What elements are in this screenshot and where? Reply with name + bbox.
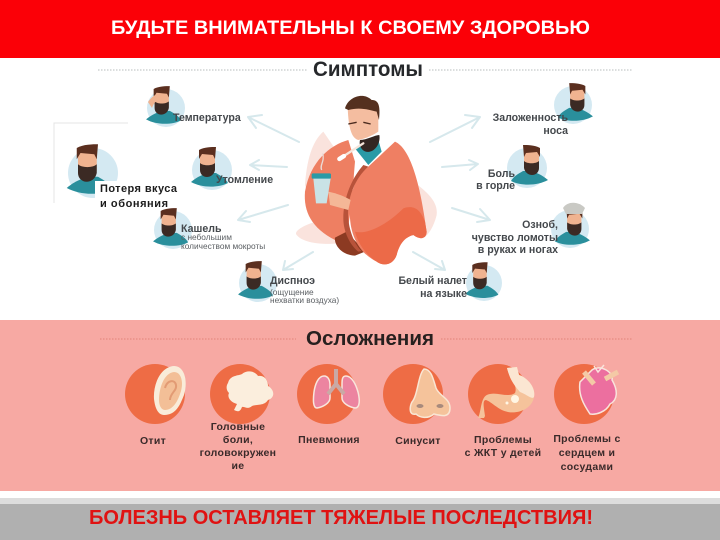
complication: heart and vascular problems [553, 364, 621, 473]
symptom: cough: с небольшим [181, 232, 232, 242]
complication: otitis [125, 364, 186, 447]
symptom: temperature: Температура [173, 112, 241, 124]
symptom: loss of taste and smell [54, 123, 178, 210]
complication: headaches and dizziness: головокружен [200, 447, 276, 459]
panel: complications [0, 320, 720, 491]
footer band: БОЛЕЗНЬ ОСТАВЛЯЕТ ТЯЖЕЛЫЕ ПОСЛЕДСТВИЯ! [89, 506, 593, 529]
complication: headaches and dizziness [200, 364, 276, 472]
symptom: cough: Кашель [181, 223, 222, 235]
symptom: temperature [146, 86, 241, 127]
symptom: chills: чувство ломоты [472, 232, 558, 244]
symptom: nasal congestion: носа [543, 125, 568, 137]
central figure: sick man in blanket [296, 96, 437, 264]
symptom: dyspnea [238, 261, 339, 305]
complication: pneumonia [297, 364, 360, 446]
symptom: sore throat: Боль [488, 168, 515, 180]
symptom: chills: в руках и ногах [478, 244, 558, 256]
complication: heart and vascular problems: сердцем и [559, 447, 615, 459]
complication: headaches and dizziness: боли, [223, 434, 253, 446]
heading: symptoms: Симптомы [313, 58, 423, 81]
symptom: loss of taste and smell: Потеря вкуса [100, 183, 178, 195]
arrows around the central figure [238, 115, 490, 270]
complication: gastrointestinal problems: Проблемы [474, 434, 532, 446]
symptom: dyspnea: Диспноэ [270, 275, 315, 287]
symptom: sore throat: в горле [476, 180, 515, 192]
symptom: chills: Озноб, [522, 219, 558, 231]
symptom: dyspnea: нехватки воздуха) [270, 295, 339, 305]
symptom: nasal congestion [493, 83, 593, 137]
complication: headaches and dizziness: ие [232, 460, 244, 472]
symptom: sore throat [476, 145, 548, 192]
footer band [0, 498, 720, 540]
complication: sinusitis [383, 364, 450, 447]
complication: gastrointestinal problems: с ЖКТ у детей [465, 447, 541, 459]
complication: sinusitis: Синусит [395, 435, 441, 447]
heading: complications: Осложнения [306, 328, 434, 350]
symptom: fatigue: Утомление [216, 174, 273, 186]
symptom: fatigue [191, 147, 273, 190]
symptom: nasal congestion: Заложенность [493, 112, 568, 124]
symptom: white coating on tongue: Белый налет [398, 275, 467, 287]
symptom: chills [472, 203, 590, 256]
complication: gastrointestinal problems [465, 364, 541, 459]
header banner [0, 0, 720, 58]
header banner: БУДЬТЕ ВНИМАТЕЛЬНЫ К СВОЕМУ ЗДОРОВЬЮ [111, 17, 590, 39]
complication: otitis: Отит [140, 435, 166, 447]
symptom: cough [153, 208, 265, 251]
symptom: loss of taste and smell: и обоняния [100, 198, 168, 210]
symptom: white coating on tongue: на языке [420, 288, 467, 300]
complication: heart and vascular problems: Проблемы с [553, 433, 621, 445]
symptom: cough: количеством мокроты [181, 241, 265, 251]
complication: heart and vascular problems: сосудами [561, 461, 613, 473]
symptom: dyspnea: (ощущение [270, 287, 314, 297]
complication: headaches and dizziness: Головные [211, 421, 265, 433]
complication: pneumonia: Пневмония [298, 434, 360, 446]
symptom: white coating on tongue [398, 262, 502, 301]
